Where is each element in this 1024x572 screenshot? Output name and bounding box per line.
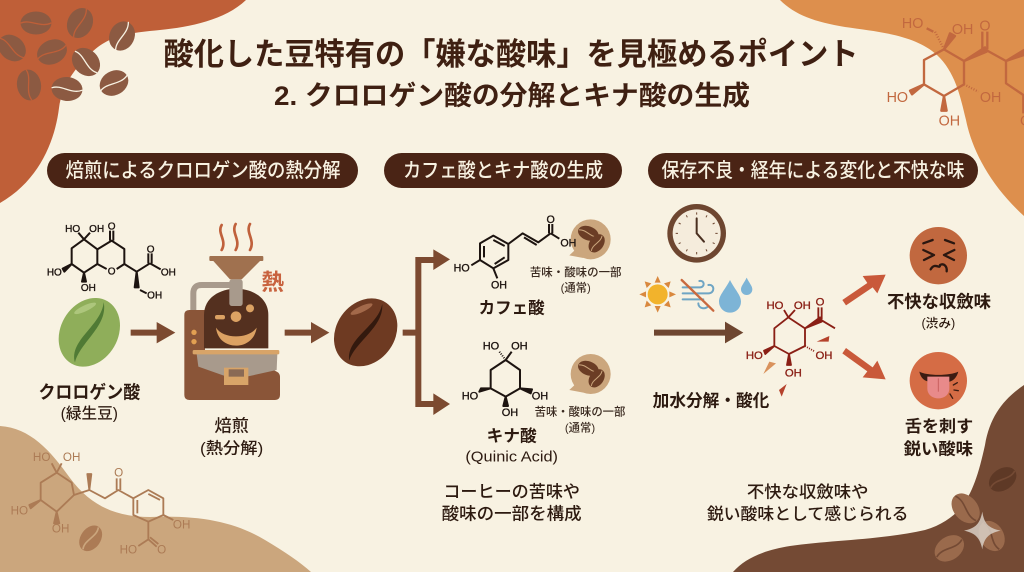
molecule: chlorogenic acid: O — [108, 267, 116, 278]
text: roasting label: 焙煎 — [214, 415, 249, 435]
molecule: chlorogenic acid: O — [108, 221, 116, 232]
text: sharp acidity label — [904, 417, 973, 458]
text: caffeic acid label: カフェ酸 — [479, 298, 545, 317]
molecule: oxidized acid: OH — [785, 368, 802, 380]
text: quinic acid label: (Quinic Acid) — [465, 450, 558, 466]
molecule: oxidized acid: HO — [746, 350, 763, 362]
text: quinic acid label: キナ酸 — [487, 427, 537, 446]
corner blob: top left orange — [0, 0, 246, 203]
label: heat: 熱 — [261, 269, 284, 295]
icon: astringent face — [910, 227, 967, 284]
text: hydrolysis label: 加水分解・酸化 — [653, 391, 769, 411]
molecule decoration: bottom left: HO — [120, 544, 137, 557]
arrow: bean to roaster — [131, 322, 175, 343]
text: chlorogenic acid label — [38, 382, 141, 423]
text: chlorogenic acid label: (緑生豆) — [61, 406, 118, 423]
molecule: chlorogenic acid: HO — [65, 224, 80, 235]
arrow: branching — [403, 249, 450, 415]
text: quinic acid note: (通常) — [565, 421, 595, 435]
heading pill: formation — [384, 153, 622, 188]
heading pill: storage — [648, 153, 978, 188]
text: astringent label: (渋み) — [921, 316, 955, 330]
molecule: quinic acid: OH — [502, 407, 518, 419]
icon: bubble bean top — [569, 219, 611, 259]
text: astringent label: 不快な収斂味 — [887, 292, 991, 312]
corner blob: top right amber — [780, 0, 1024, 216]
icon: bubble bean bottom — [569, 354, 611, 394]
icon: sun — [639, 276, 676, 313]
molecule decoration: bottom left: HO — [33, 451, 50, 464]
text: formation summary — [442, 483, 582, 523]
icon: roaster — [184, 224, 280, 400]
text: caffeic acid note: 苦味・酸味の一部 — [530, 265, 621, 279]
panel: storage degradation — [639, 204, 991, 523]
text: caffeic acid note — [530, 265, 621, 295]
molecule: quinic acid: OH — [511, 341, 528, 353]
molecule: caffeic acid: OH — [491, 280, 507, 292]
molecule: caffeic acid: O — [547, 214, 555, 226]
molecule: chlorogenic acid: OH — [161, 268, 176, 279]
molecule: chlorogenic acid: HO — [47, 268, 62, 279]
text: formation summary: 酸味の一部を構成 — [442, 504, 582, 523]
molecule decoration: bottom left — [11, 451, 190, 557]
molecule decoration: top right: HO — [902, 16, 923, 32]
icon: roasted coffee bean — [321, 286, 410, 379]
decoration: coffee beans and sparkle bottom right — [930, 462, 1021, 567]
heading pill: roasting: 焙煎によるクロロゲン酸の熱分解 — [66, 159, 340, 182]
molecule: oxidized acid: HO — [766, 300, 784, 312]
icon: green coffee bean — [47, 287, 132, 378]
icon: clock — [667, 204, 726, 263]
molecule decoration: bottom left: OH — [173, 518, 190, 531]
text: sharp acidity label: 舌を刺す — [905, 417, 973, 436]
panel: roasting process — [38, 221, 410, 457]
molecule: chlorogenic acid — [47, 221, 176, 302]
molecule: chlorogenic acid: OH — [89, 224, 104, 235]
text: sharp acidity label: 鋭い酸味 — [904, 439, 973, 458]
molecule decoration: bottom left: OH — [52, 523, 69, 536]
molecule decoration: top right — [887, 16, 1024, 129]
molecule: chlorogenic acid: OH — [81, 283, 96, 294]
molecule: quinic acid: HO — [483, 341, 500, 353]
molecule: oxidized acid: OH — [815, 350, 832, 362]
icon: water drops — [719, 278, 752, 313]
molecule decoration: bottom left: OH — [63, 451, 80, 464]
text: quinic acid note — [535, 405, 625, 435]
text: quinic acid label — [465, 427, 558, 466]
text: caffeic acid note: (通常) — [561, 281, 591, 295]
arrow: to sharp acidity — [842, 348, 886, 379]
text: formation summary: コーヒーの苦味や — [443, 483, 580, 502]
text: roasting label: (熱分解) — [200, 439, 263, 457]
text: roasting label — [200, 415, 263, 457]
arrow: storage to molecule — [654, 322, 743, 343]
icon: tongue face — [910, 352, 967, 409]
molecule decoration: bottom left: O — [114, 467, 123, 480]
text: storage summary — [707, 483, 908, 523]
molecule: quinic acid — [462, 341, 548, 419]
molecule: caffeic acid: HO — [454, 262, 470, 274]
molecule decoration: top right: OH — [980, 90, 1001, 106]
molecule: chlorogenic acid: O — [147, 244, 155, 255]
text: chlorogenic acid label: クロロゲン酸 — [38, 382, 141, 403]
subtitle: 2. クロロゲン酸の分解とキナ酸の生成 — [274, 81, 750, 111]
molecule: quinic acid: HO — [462, 390, 479, 402]
heading pill: roasting — [47, 153, 358, 188]
arrow: to astringent — [842, 275, 886, 305]
panel: caffeic and quinic acid formation — [403, 214, 625, 523]
molecule: caffeic acid — [454, 214, 576, 292]
molecule: oxidized acid: OH — [794, 300, 811, 312]
molecule: caffeic acid: OH — [560, 237, 576, 249]
molecule: chlorogenic acid: OH — [147, 291, 162, 302]
text: storage summary: 不快な収斂味や — [747, 483, 868, 502]
decoration: coffee beans top left — [0, 4, 140, 102]
arrow: roaster to bean — [285, 322, 329, 343]
molecule decoration: top right: HO — [887, 90, 908, 106]
molecule: oxidized acid — [746, 297, 835, 397]
text: quinic acid note: 苦味・酸味の一部 — [535, 405, 625, 419]
molecule decoration: bottom left: O — [157, 544, 166, 557]
corner blob: bottom left tan — [0, 426, 311, 572]
text: storage summary: 鋭い酸味として感じられる — [707, 504, 908, 523]
molecule decoration: top right: OH — [952, 22, 973, 38]
molecule decoration: top right: O — [979, 19, 991, 35]
molecule decoration: top right: OH — [939, 113, 960, 129]
molecule: oxidized acid: O — [816, 297, 825, 309]
molecule: quinic acid: OH — [532, 390, 548, 402]
icon: wind crossed out — [682, 280, 713, 311]
molecule decoration: bottom left: HO — [11, 504, 28, 517]
corner blob: bottom right brown — [733, 385, 1024, 572]
text: astringent label — [887, 292, 991, 330]
heading pill: storage: 保存不良・経年による変化と不快な味 — [662, 159, 964, 182]
title: 酸化した豆特有の「嫌な酸味」を見極めるポイント — [164, 37, 858, 72]
heading pill: formation: カフェ酸とキナ酸の生成 — [403, 159, 603, 182]
